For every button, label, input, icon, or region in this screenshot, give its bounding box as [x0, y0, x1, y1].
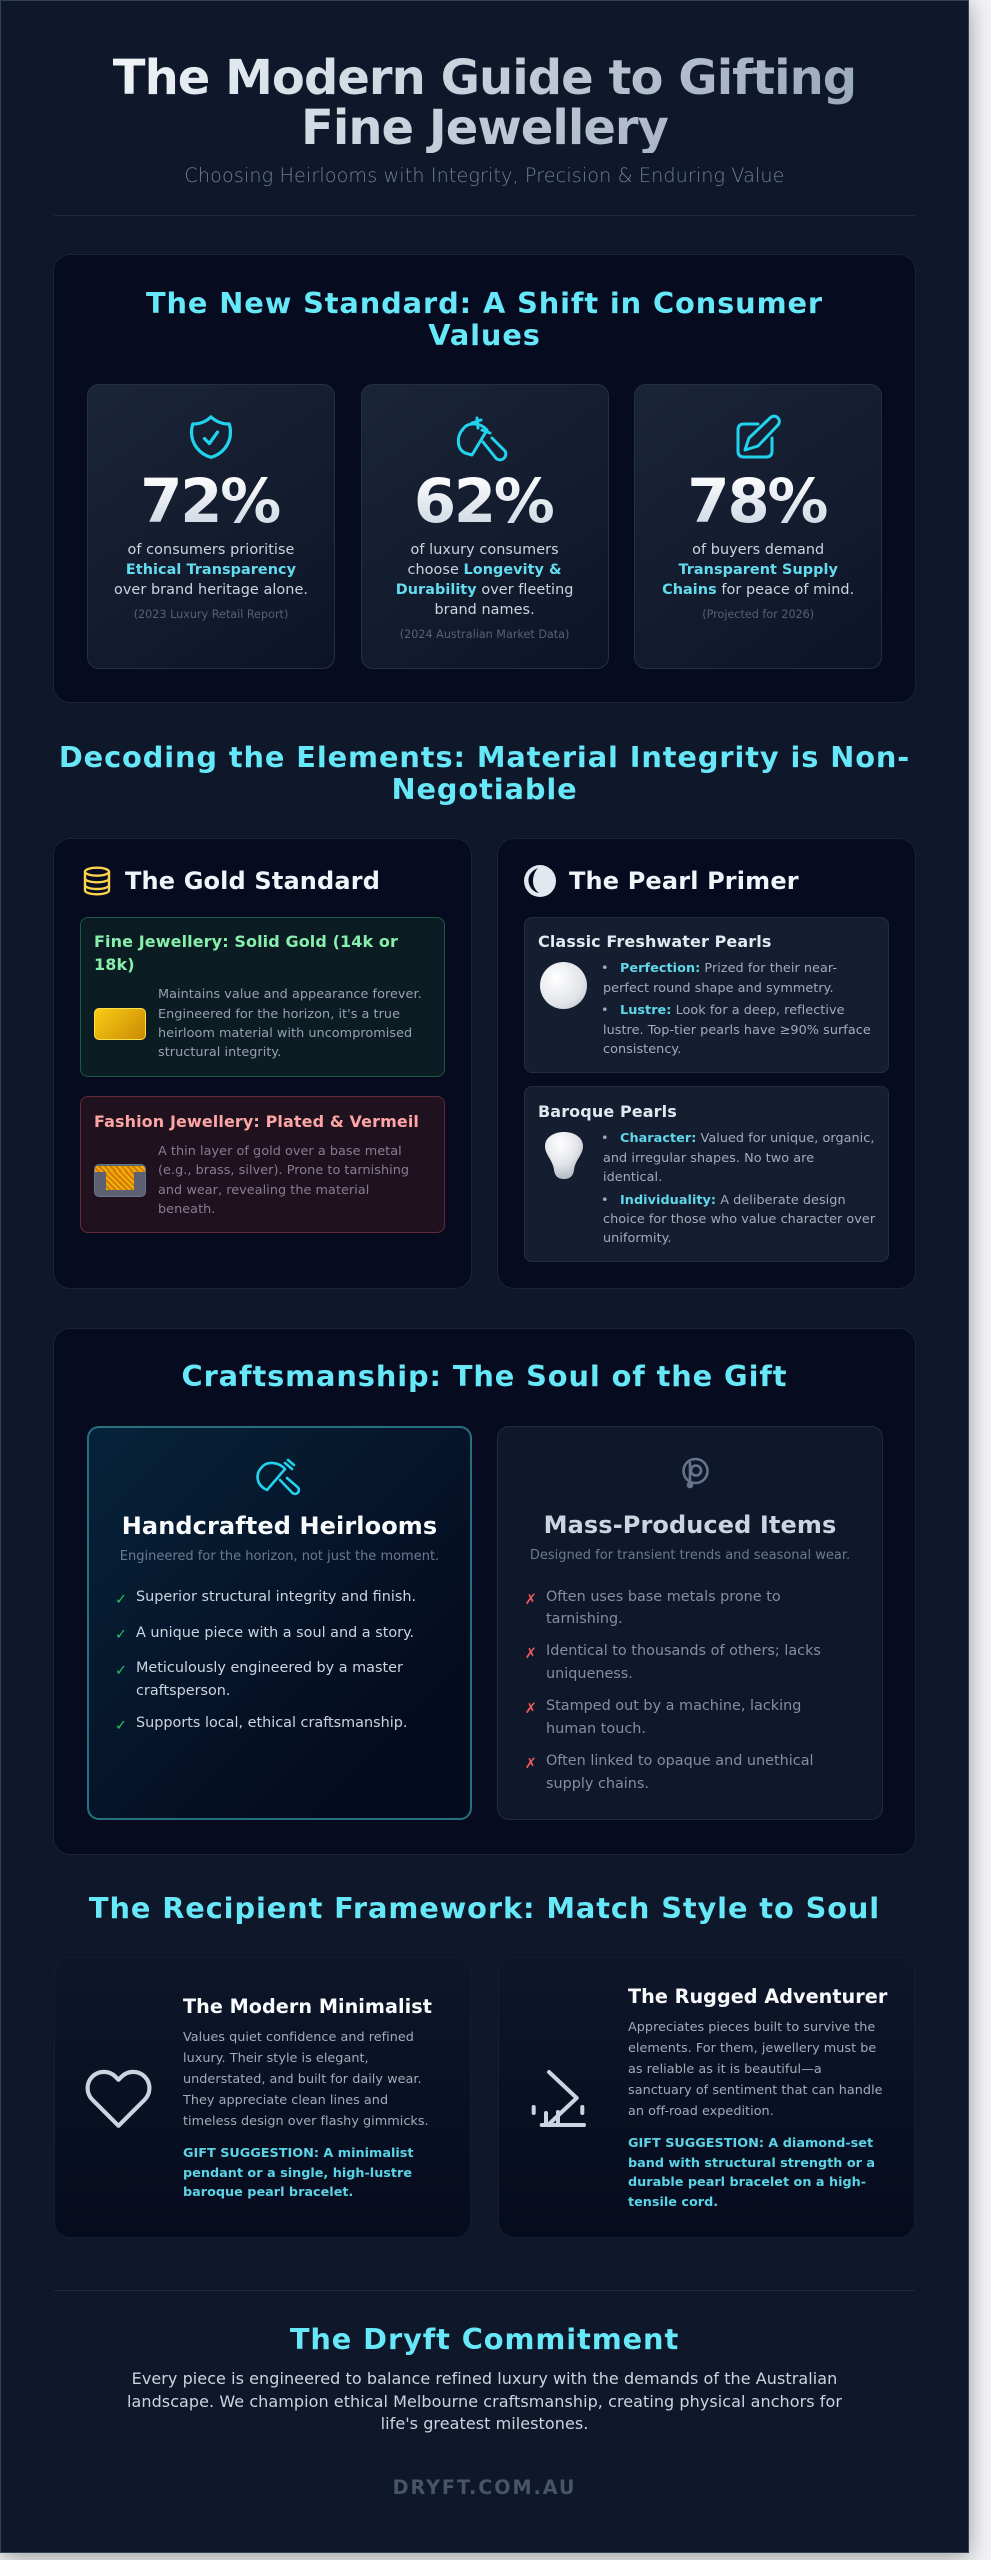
bullet: lustre: lustre. Top-tier pearls have ≥90% surface	[603, 1023, 871, 1038]
bullet: lustre: •	[601, 1003, 609, 1018]
card: mass-produced items	[497, 1426, 883, 1820]
gift suggestion: tensile cord.	[628, 2195, 718, 2210]
drawback list: Often linked to opaque and unethical	[546, 1753, 814, 1769]
statistic: 72%: 72%	[140, 466, 279, 537]
icon: round pearl	[540, 962, 587, 1009]
drawback list: ✗	[525, 1701, 537, 1717]
persona description: an off-road expedition.	[628, 2104, 774, 2119]
description: longevity and durability: brand names.	[434, 602, 535, 618]
description: longevity and durability: of luxury consumers	[411, 542, 559, 558]
footer brand: DRYFT.COM.AU	[393, 2476, 576, 2499]
stat card: 72%	[87, 384, 335, 669]
card: classic freshwater pearls	[524, 917, 889, 1073]
persona description: timeless design over flashy gimmicks.	[183, 2114, 429, 2129]
card text	[158, 1144, 409, 1217]
persona description: elements. For them, jewellery must be	[628, 2041, 876, 2056]
persona description: luxury. Their style is elegant,	[183, 2051, 369, 2066]
card text	[158, 987, 422, 1060]
bullet: individuality: •	[601, 1193, 609, 1208]
heading: the recipient framework: The Recipient Framework: Match Style to Soul	[89, 1891, 880, 1925]
heading: decoding the elements	[59, 740, 910, 806]
checklist: ✓	[115, 1663, 127, 1679]
icon: coin stack	[84, 866, 110, 896]
card: the modern minimalist	[54, 1957, 471, 2238]
bullet: individuality: uniformity.	[603, 1231, 672, 1246]
bullet: character: identical.	[603, 1170, 662, 1185]
description: transparent supply chains: Chains for peace of mind.	[662, 582, 854, 598]
heading: the new standard: Values	[428, 318, 541, 352]
drawback list: ✗	[525, 1646, 537, 1662]
icon: machine gear	[682, 1458, 709, 1488]
checklist	[115, 1589, 416, 1734]
title: Fine Jewellery	[301, 100, 668, 156]
statistic: 78%	[633, 472, 881, 532]
bullet: lustre: Lustre: Look for a deep, reflective	[620, 1003, 845, 1018]
card text: Engineered for the horizon, it's a true	[158, 1007, 400, 1022]
gift suggestion	[183, 2146, 414, 2200]
card title: 18k)	[94, 955, 135, 974]
subtitle: Choosing Heirlooms with Integrity, Precision & Enduring Value	[184, 164, 785, 186]
icon: hammer	[456, 416, 508, 462]
card subtitle: Engineered for the horizon, not just the moment.	[120, 1548, 439, 1564]
card text: (e.g., brass, silver). Prone to tarnishing	[158, 1163, 409, 1178]
card title: Handcrafted Heirlooms	[122, 1512, 437, 1540]
swatch: solid gold	[94, 1008, 146, 1040]
drawback list: Stamped out by a machine, lacking	[546, 1698, 801, 1714]
persona description: understated, and built for daily wear.	[183, 2072, 422, 2087]
bullet: perfection: perfect round shape and symmetry.	[603, 981, 834, 996]
checklist: ✓	[115, 1592, 127, 1608]
heading: the gold standard: The Gold Standard	[125, 867, 380, 895]
drawback list: ✗	[525, 1592, 537, 1608]
drawback list	[525, 1589, 821, 1792]
bullet: character: •	[601, 1131, 609, 1146]
checklist: Superior structural integrity and finish.	[136, 1589, 416, 1605]
persona description: Values quiet confidence and refined	[183, 2030, 414, 2045]
source note: (Projected for 2026)	[702, 608, 814, 621]
panel: the new standard	[54, 255, 915, 702]
drawback list: ✗	[525, 1756, 537, 1772]
description: ethical transparency: of consumers prioritise	[128, 542, 294, 558]
footer text: landscape. We champion ethical Melbourne craftsmanship, creating physical anchors for	[127, 2392, 842, 2410]
icon: hammer	[256, 1458, 300, 1496]
card title: Mass-Produced Items	[544, 1510, 836, 1538]
persona description: They appreciate clean lines and	[183, 2093, 388, 2108]
description: transparent supply chains: of buyers demand	[692, 542, 824, 558]
drawback list: uniqueness.	[546, 1666, 633, 1682]
icon: moon pearl	[524, 865, 556, 897]
bullet: perfection: •	[601, 961, 609, 976]
bullet: character: Character: Valued for unique, organic,	[620, 1131, 874, 1146]
panel: the gold standard	[54, 839, 471, 1288]
card title	[94, 932, 398, 974]
persona title: The Rugged Adventurer	[628, 1985, 887, 2008]
bullet: perfection	[601, 961, 837, 996]
card text: structural integrity.	[158, 1045, 281, 1060]
card title: Fine Jewellery: Solid Gold (14k or	[94, 932, 398, 951]
panel: the pearl primer	[498, 839, 915, 1288]
card: baroque pearls	[524, 1086, 889, 1262]
drawback list: Identical to thousands of others; lacks	[546, 1643, 821, 1659]
description: ethical transparency: over brand heritage alone.	[114, 582, 308, 598]
card title: Baroque Pearls	[538, 1102, 677, 1121]
footer text	[127, 2369, 842, 2433]
card text: heirloom material with uncompromised	[158, 1026, 412, 1041]
description: ethical transparency: Ethical Transparency	[126, 562, 296, 578]
gift suggestion: durable pearl bracelet on a high-	[628, 2175, 866, 2190]
gift suggestion: GIFT SUGGESTION: A diamond-set	[628, 2136, 873, 2151]
icon: shield check	[190, 415, 232, 459]
checklist: craftsperson.	[136, 1683, 231, 1699]
card text: and wear, revealing the material	[158, 1183, 369, 1198]
gift suggestion: baroque pearl bracelet.	[183, 2185, 353, 2200]
card: handcrafted heirlooms	[87, 1426, 472, 1820]
statistic: 62%	[359, 472, 607, 532]
footer text: Every piece is engineered to balance refined luxury with the demands of the Australian	[132, 2369, 837, 2388]
drawback list: human touch.	[546, 1721, 646, 1737]
checklist: Meticulously engineered by a master	[136, 1660, 403, 1676]
card text: beneath.	[158, 1202, 215, 1217]
persona description	[628, 2020, 883, 2119]
source note: (2024 Australian Market Data)	[400, 628, 569, 641]
bullet: individuality: choice for those who value character over	[603, 1212, 875, 1227]
card: fine jewellery	[80, 917, 445, 1077]
drawback list: tarnishing.	[546, 1611, 623, 1627]
panel: craftsmanship	[54, 1329, 915, 1854]
heading: craftsmanship: Craftsmanship: The Soul of the Gift	[182, 1359, 787, 1393]
card text: Maintains value and appearance forever.	[158, 987, 422, 1002]
bullet: perfection: Perfection: Prized for their near-	[620, 961, 837, 976]
heading: the new standard: The New Standard: A Shift in Consumer	[146, 286, 823, 320]
icon: baroque pearl	[545, 1132, 583, 1179]
icon: pencil square	[736, 414, 781, 458]
checklist: Supports local, ethical craftsmanship.	[136, 1715, 407, 1731]
bullet: character: and irregular shapes. No two are	[603, 1151, 814, 1166]
card: the rugged adventurer	[498, 1957, 915, 2238]
description: transparent supply chains	[662, 542, 854, 598]
footer text: life's greatest milestones.	[381, 2414, 588, 2433]
persona description: as reliable as it is beautiful—a	[628, 2062, 822, 2077]
description: ethical transparency	[114, 542, 308, 598]
gift suggestion	[628, 2136, 875, 2210]
heading: the new standard	[146, 286, 823, 352]
description: transparent supply chains: Transparent Supply	[678, 562, 838, 578]
persona title: The Modern Minimalist	[183, 1995, 432, 2018]
card text: A thin layer of gold over a base metal	[158, 1144, 402, 1159]
icon: heart	[86, 2070, 152, 2128]
heading: the dryft commitment: The Dryft Commitment	[290, 2322, 679, 2356]
card: fashion jewellery	[80, 1096, 445, 1233]
card title: Fashion Jewellery: Plated & Vermeil	[94, 1112, 419, 1131]
heading: decoding the elements: Decoding the Elements: Material Integrity is Non-	[59, 740, 910, 774]
heading: decoding the elements: Negotiable	[391, 772, 578, 806]
statistic: 72%	[86, 472, 334, 532]
bullet: lustre	[601, 1003, 871, 1057]
swatch: plated metal	[94, 1164, 146, 1197]
persona description: Appreciates pieces built to survive the	[628, 2020, 875, 2035]
checklist: ✓	[115, 1718, 127, 1734]
statistic: 78%: 78%	[687, 466, 826, 537]
card subtitle: Designed for transient trends and seasonal wear.	[530, 1548, 850, 1562]
gift suggestion: pendant or a single, high-lustre	[183, 2166, 412, 2181]
bullet: lustre: consistency.	[603, 1042, 681, 1057]
description: longevity and durability	[396, 542, 573, 618]
gift suggestion: GIFT SUGGESTION: A minimalist	[183, 2146, 413, 2161]
stat card: 62%	[361, 384, 609, 669]
checklist: A unique piece with a soul and a story.	[136, 1625, 414, 1641]
title: The Modern Guide to Gifting	[113, 50, 856, 106]
drawback list: supply chains.	[546, 1776, 649, 1792]
bullet: individuality	[601, 1193, 876, 1246]
description: longevity and durability: Durability over fleeting	[396, 582, 573, 598]
drawback list: Often uses base metals prone to	[546, 1589, 781, 1605]
checklist: ✓	[115, 1627, 127, 1643]
bullet: individuality: Individuality: A deliberate design	[620, 1193, 846, 1208]
card title: Classic Freshwater Pearls	[538, 932, 771, 951]
stat card: 78%	[634, 384, 882, 669]
persona description	[182, 2030, 429, 2129]
heading: the pearl primer: The Pearl Primer	[569, 867, 799, 895]
bullet: character	[601, 1131, 874, 1185]
statistic: 62%: 62%	[414, 466, 552, 537]
gift suggestion: band with structural strength or a	[628, 2156, 875, 2171]
description: longevity and durability: choose Longevity &	[408, 562, 562, 578]
title	[0, 53, 969, 153]
source note: (2023 Luxury Retail Report)	[134, 608, 288, 621]
icon: rugged mark	[532, 2070, 586, 2128]
persona description: sanctuary of sentiment that can handle	[628, 2083, 883, 2098]
